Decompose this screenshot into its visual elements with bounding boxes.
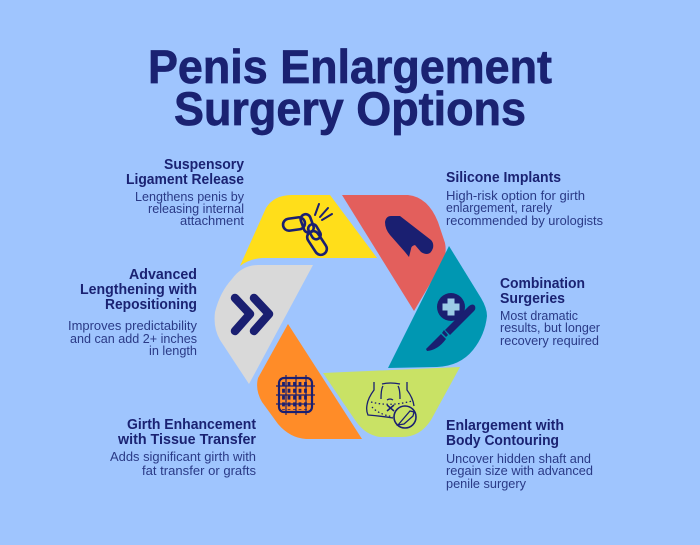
label: silicone implants [446, 170, 603, 228]
title: Penis Enlargement [148, 40, 552, 93]
label: suspensory ligament release: Ligament Release [126, 172, 244, 188]
label: suspensory ligament release: attachment [180, 214, 245, 228]
panel: combination surgeries segment [388, 246, 487, 368]
label: enlargement with body contouring: regain size with advanced [446, 464, 593, 478]
panel: suspensory ligament release segment [240, 195, 377, 266]
label: advanced lengthening with repositioning: in length [149, 344, 197, 358]
icon: broken chain [282, 204, 332, 257]
label: girth enhancement with tissue transfer: with Tissue Transfer [117, 432, 256, 448]
label: advanced lengthening with repositioning: Advanced [129, 267, 197, 283]
label: advanced lengthening with repositioning: and can add 2+ inches [70, 332, 197, 346]
label: suspensory ligament release: Suspensory [164, 157, 244, 173]
label: silicone implants: High-risk option for girth [446, 189, 585, 203]
label: combination surgeries: Surgeries [500, 291, 565, 307]
icon: tissue mesh graft [276, 375, 315, 415]
title: Surgery Options [174, 82, 526, 135]
panel: silicone implants segment [342, 195, 446, 311]
panel: enlargement with body contouring segment [323, 367, 460, 437]
panel: advanced lengthening with repositioning segment [215, 265, 313, 384]
label: combination surgeries: Most dramatic [500, 309, 578, 323]
label: advanced lengthening with repositioning: Repositioning [105, 297, 197, 313]
label: suspensory ligament release [126, 157, 245, 228]
label: enlargement with body contouring [446, 418, 593, 491]
label: suspensory ligament release: Lengthens penis by [135, 190, 245, 204]
label: girth enhancement with tissue transfer: Adds significant girth with [110, 450, 256, 464]
label: silicone implants: enlargement, rarely [446, 201, 553, 215]
icon: medical cross and scalpel [426, 293, 475, 351]
label: combination surgeries: results, but longer [500, 321, 600, 335]
icon: double chevron [235, 298, 269, 331]
label: combination surgeries: recovery required [500, 334, 599, 348]
label: advanced lengthening with repositioning: Improves predictability [68, 319, 198, 333]
label: combination surgeries: Combination [500, 276, 585, 292]
label: girth enhancement with tissue transfer: fat transfer or grafts [142, 464, 256, 478]
label: silicone implants: recommended by urologists [446, 214, 603, 228]
label: silicone implants: Silicone Implants [446, 170, 561, 186]
icon: abdomen with marked incision [367, 382, 416, 428]
label: enlargement with body contouring: Body Contouring [446, 433, 559, 449]
label: combination surgeries [500, 276, 600, 348]
title [148, 40, 552, 135]
label: girth enhancement with tissue transfer: Girth Enhancement [127, 417, 256, 433]
panel: girth enhancement with tissue transfer segment [257, 324, 362, 439]
label: enlargement with body contouring: Enlargement with [446, 418, 564, 434]
label: enlargement with body contouring: Uncover hidden shaft and [446, 452, 591, 466]
label: suspensory ligament release: releasing internal [148, 202, 244, 216]
icon: silicone implant [385, 216, 433, 257]
label: enlargement with body contouring: penile surgery [446, 477, 527, 491]
label: advanced lengthening with repositioning: Lengthening with [80, 282, 197, 298]
label: girth enhancement with tissue transfer [110, 417, 256, 478]
label: advanced lengthening with repositioning [68, 267, 198, 358]
